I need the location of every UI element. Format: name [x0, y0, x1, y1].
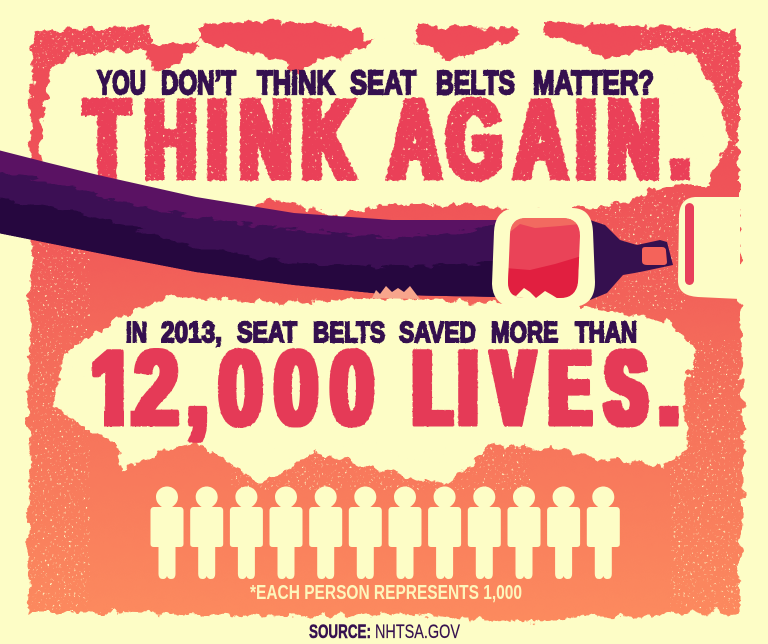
- icon: person 6: [349, 486, 382, 579]
- pictogram: twelve people: [150, 486, 620, 579]
- icon: buckle tongue: [590, 220, 673, 300]
- source line: NHTSA.GOV: [375, 622, 460, 643]
- icon: person 3: [230, 486, 263, 579]
- text: in 2013 seat belts saved more than: 2013,: [161, 317, 222, 349]
- text: in 2013 seat belts saved more than: BELTS: [313, 317, 385, 349]
- jagged strap tear near the buckle: [372, 286, 420, 299]
- heading: 12,000 lives: [85, 329, 677, 447]
- icon: buckle latch plate: [492, 208, 595, 308]
- text: you don't think seat belts matter: YOU: [97, 64, 146, 101]
- text: you don't think seat belts matter: [97, 64, 654, 101]
- heading: think again: AGAIN.: [389, 77, 690, 202]
- text: you don't think seat belts matter: SEAT: [350, 64, 416, 101]
- icon: person 10: [508, 486, 540, 579]
- text: in 2013 seat belts saved more than: MORE: [491, 317, 558, 349]
- icon: person 12: [587, 486, 620, 579]
- heading: 12,000 lives: LIVES.: [414, 331, 677, 447]
- heading: 12,000 lives: 12,000: [91, 329, 374, 447]
- text: you don't think seat belts matter: MATTER?: [533, 64, 654, 101]
- caption: each person represents 1,000: *EACH PERSON REPRESENTS 1,000: [250, 582, 522, 604]
- icon: person 9: [468, 486, 501, 579]
- text: in 2013 seat belts saved more than: SAVED: [399, 317, 476, 349]
- source line: [309, 622, 460, 643]
- text: in 2013 seat belts saved more than: SEAT: [237, 317, 297, 349]
- text: in 2013 seat belts saved more than: IN: [126, 317, 147, 349]
- text: you don't think seat belts matter: DON’T: [161, 64, 236, 101]
- icon: person 4: [270, 486, 302, 579]
- panel: lower cream cloud behind lives statistic: [54, 296, 696, 484]
- heading: think again: THINK: [85, 77, 353, 202]
- text: you don't think seat belts matter: BELTS: [436, 64, 515, 101]
- text: in 2013 seat belts saved more than: THAN: [575, 317, 637, 349]
- text: you don't think seat belts matter: THINK: [257, 64, 335, 101]
- icon: person 5: [309, 486, 342, 579]
- source line: SOURCE:: [309, 622, 371, 643]
- icon: seat belt receiver: [678, 197, 740, 299]
- icon: person 11: [547, 486, 580, 579]
- icon: seat belt strap: [0, 150, 496, 299]
- icon: person 2: [190, 486, 223, 579]
- panel: upper cream area behind headline: [40, 32, 728, 230]
- icon: person 8: [428, 486, 461, 579]
- icon: person 7: [388, 486, 422, 579]
- icon: person 1: [150, 486, 184, 579]
- heading: think again: [85, 77, 690, 202]
- text: in 2013 seat belts saved more than: [126, 317, 637, 349]
